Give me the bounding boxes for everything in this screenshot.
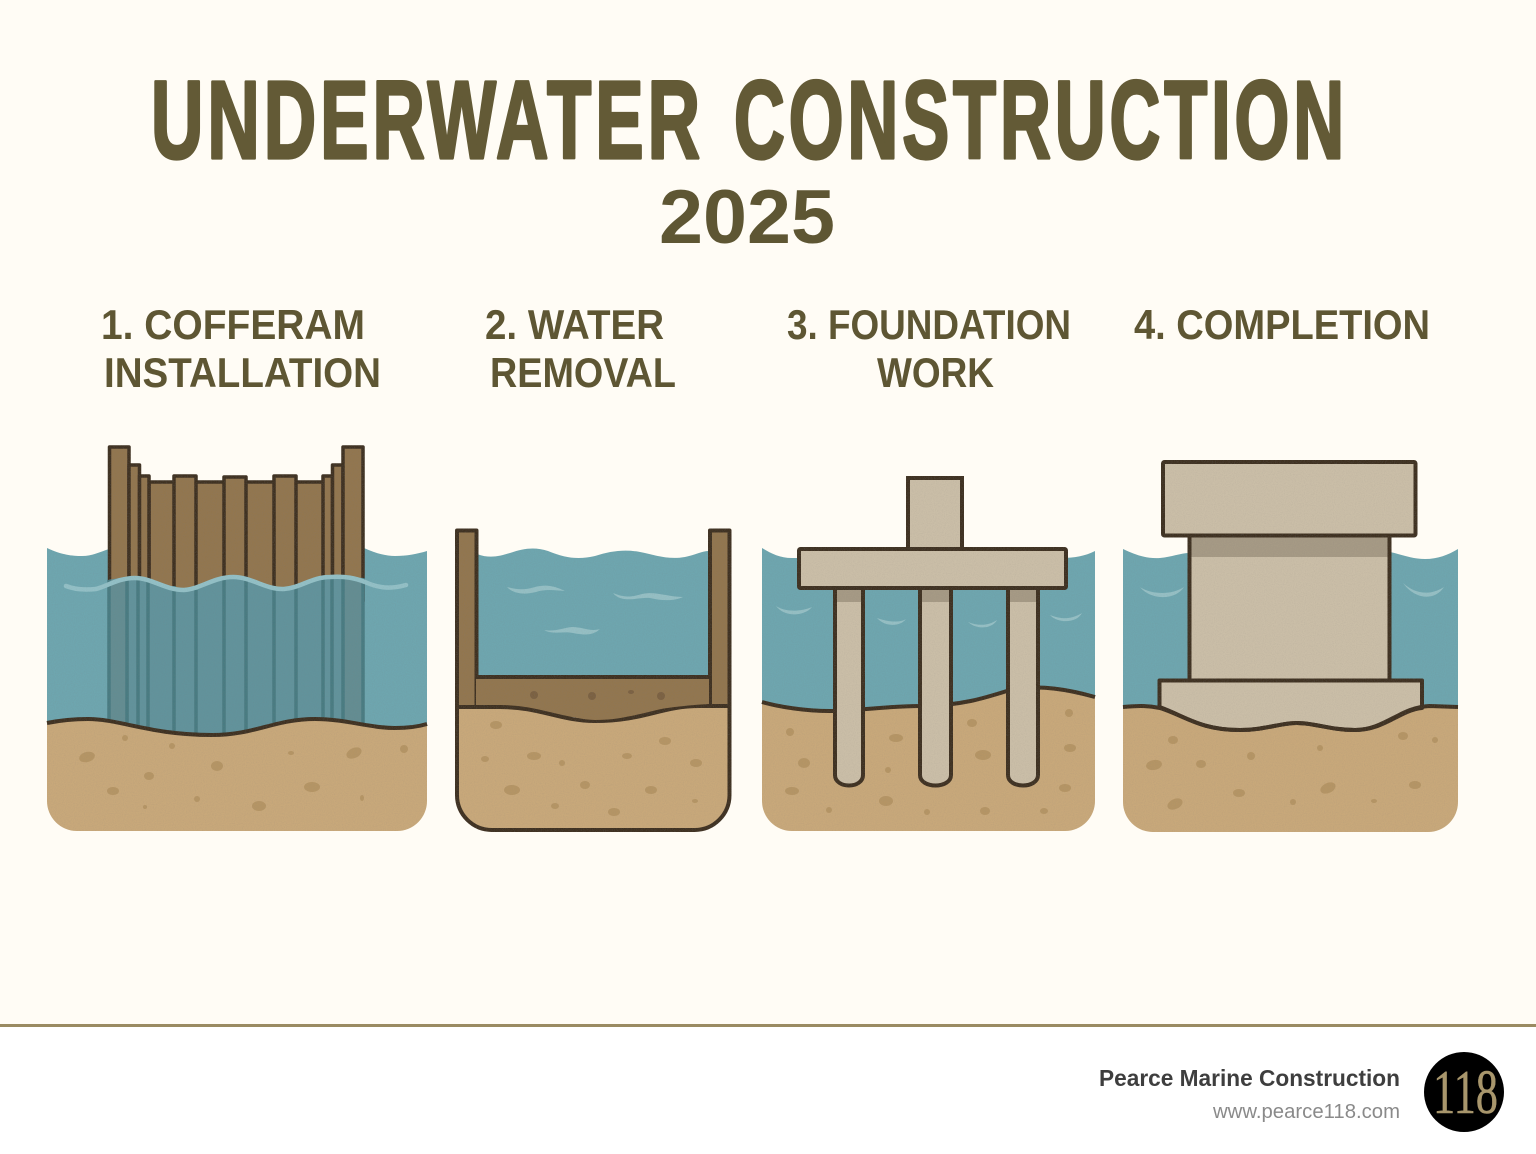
pile cap beam (799, 549, 1066, 588)
heading: step 2 (485, 301, 676, 396)
seabed line: panel 4 (1123, 706, 1458, 730)
walls (457, 530, 730, 708)
sand: panel 2 (457, 706, 730, 830)
seabed line: panel 1 (47, 719, 427, 735)
water: panel 4 (1123, 549, 1458, 720)
footer band (0, 1026, 1536, 1154)
website: www.pearce118.com (1212, 1101, 1400, 1123)
water: panel 2 (477, 549, 709, 675)
heading: step 4: 4. COMPLETION (1134, 301, 1430, 348)
heading: step 1: INSTALLATION (104, 349, 381, 396)
sand speckles: panel 3 (785, 709, 1076, 815)
foundation piles (835, 588, 1038, 786)
water: panel 1 (47, 548, 427, 745)
drained sediment layer (477, 677, 709, 717)
cofferdam sheet piles (110, 447, 363, 602)
excavation top line (476, 675, 710, 679)
heading: step 3: WORK (877, 349, 994, 396)
heading: step 3: 3. FOUNDATION (787, 301, 1071, 348)
heading: step 1: 1. COFFERAM (101, 301, 365, 348)
sand speckles: panel 4 (1145, 732, 1438, 812)
heading: step 2: REMOVAL (490, 349, 676, 396)
pile cap shadows (837, 590, 1036, 602)
footing (1160, 680, 1422, 730)
panel: foundation work (762, 478, 1095, 831)
sand: panel 3 (762, 688, 1095, 831)
completed pier column (1190, 530, 1390, 685)
sand speckles: panel 1 (78, 735, 408, 811)
panel: water removal (457, 530, 730, 830)
subtitle: year: 2025 (659, 175, 835, 260)
water ripples: panel 2 (507, 586, 683, 634)
water ripples: panel 3 (776, 606, 1082, 627)
waterline highlight (66, 577, 406, 590)
sand: panel 4 (1123, 706, 1458, 832)
drained sediment colour (476, 679, 709, 720)
column shadow (1192, 537, 1388, 557)
water: panel 3 (762, 548, 1095, 725)
heading: step 1 (101, 301, 381, 396)
seabed line: panel 3 (762, 688, 1095, 711)
pier cap (1163, 462, 1416, 536)
panel: completion (1123, 462, 1458, 832)
sand: panel 1 (47, 719, 427, 831)
column (908, 478, 962, 550)
logo badge (1424, 1052, 1504, 1132)
footer divider (0, 1024, 1536, 1027)
title: UNDERWATER (151, 59, 704, 182)
water ripples: panel 4 (1140, 583, 1444, 597)
logo badge: 118 (1433, 1059, 1498, 1127)
heading: step 2: 2. WATER (485, 301, 664, 348)
heading: step 3 (787, 301, 1071, 396)
submerged sheet piles (108, 577, 364, 745)
sand speckles: panel 2 (481, 721, 702, 816)
company name: Pearce Marine Construction (1099, 1065, 1400, 1091)
panel: cofferdam installation (47, 447, 427, 831)
